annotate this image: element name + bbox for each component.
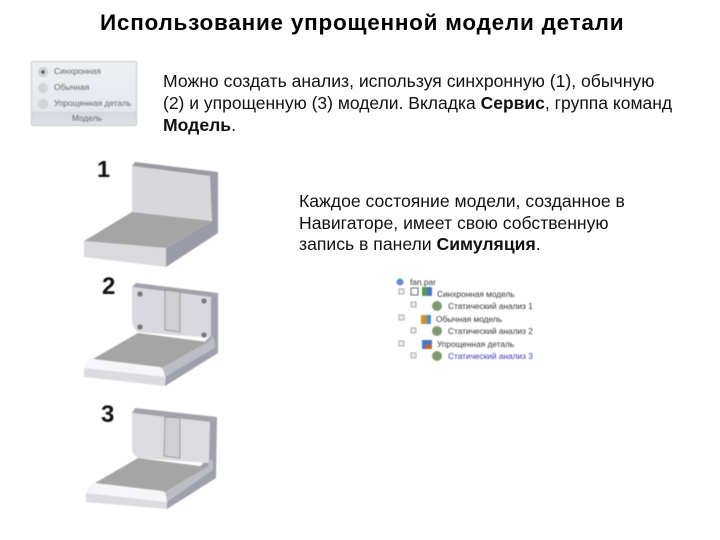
model 3 bbox=[86, 401, 217, 509]
model 1 bbox=[84, 156, 218, 267]
text block: navigator note: запись в панели Симуляция. bbox=[299, 234, 541, 254]
panel: simulation tree: Упрощенная деталь bbox=[437, 339, 514, 349]
model 2 bbox=[84, 273, 218, 386]
panel: model ribbon group bbox=[31, 61, 137, 126]
model 2: 2 bbox=[102, 273, 115, 300]
text block: intro: Можно создать анализ, используя синхронную (1), обычную bbox=[163, 71, 654, 91]
text block: navigator note bbox=[299, 191, 625, 254]
text block: intro bbox=[163, 71, 672, 135]
panel: model ribbon group: Упрощенная деталь bbox=[54, 98, 131, 108]
panel: simulation tree: Обычная модель bbox=[436, 314, 502, 324]
panel: simulation tree: fan.par bbox=[410, 277, 436, 287]
panel: model ribbon group: Модель bbox=[72, 113, 102, 123]
panel: model ribbon group: Синхронная bbox=[54, 66, 101, 76]
title: Использование упрощенной модели детали bbox=[100, 10, 624, 35]
text block: intro: (2) и упрощенную (3) модели. Вкладка Сервис, группа команд bbox=[163, 93, 672, 113]
text block: navigator note: Навигаторе, имеет свою собственную bbox=[299, 213, 609, 233]
text block: navigator note: Каждое состояние модели, созданное в bbox=[299, 191, 625, 211]
model 3: 3 bbox=[101, 401, 114, 428]
model 1: 1 bbox=[97, 156, 110, 182]
text block: intro: Модель. bbox=[163, 115, 236, 135]
panel: model ribbon group: Обычная bbox=[54, 82, 89, 92]
panel: simulation tree bbox=[396, 277, 533, 361]
panel: simulation tree: Статический анализ 2 bbox=[448, 326, 533, 336]
panel: simulation tree: Статический анализ 1 bbox=[448, 301, 533, 311]
panel: simulation tree: Статический анализ 3 bbox=[448, 351, 533, 361]
panel: simulation tree: Синхронная модель bbox=[437, 289, 515, 299]
